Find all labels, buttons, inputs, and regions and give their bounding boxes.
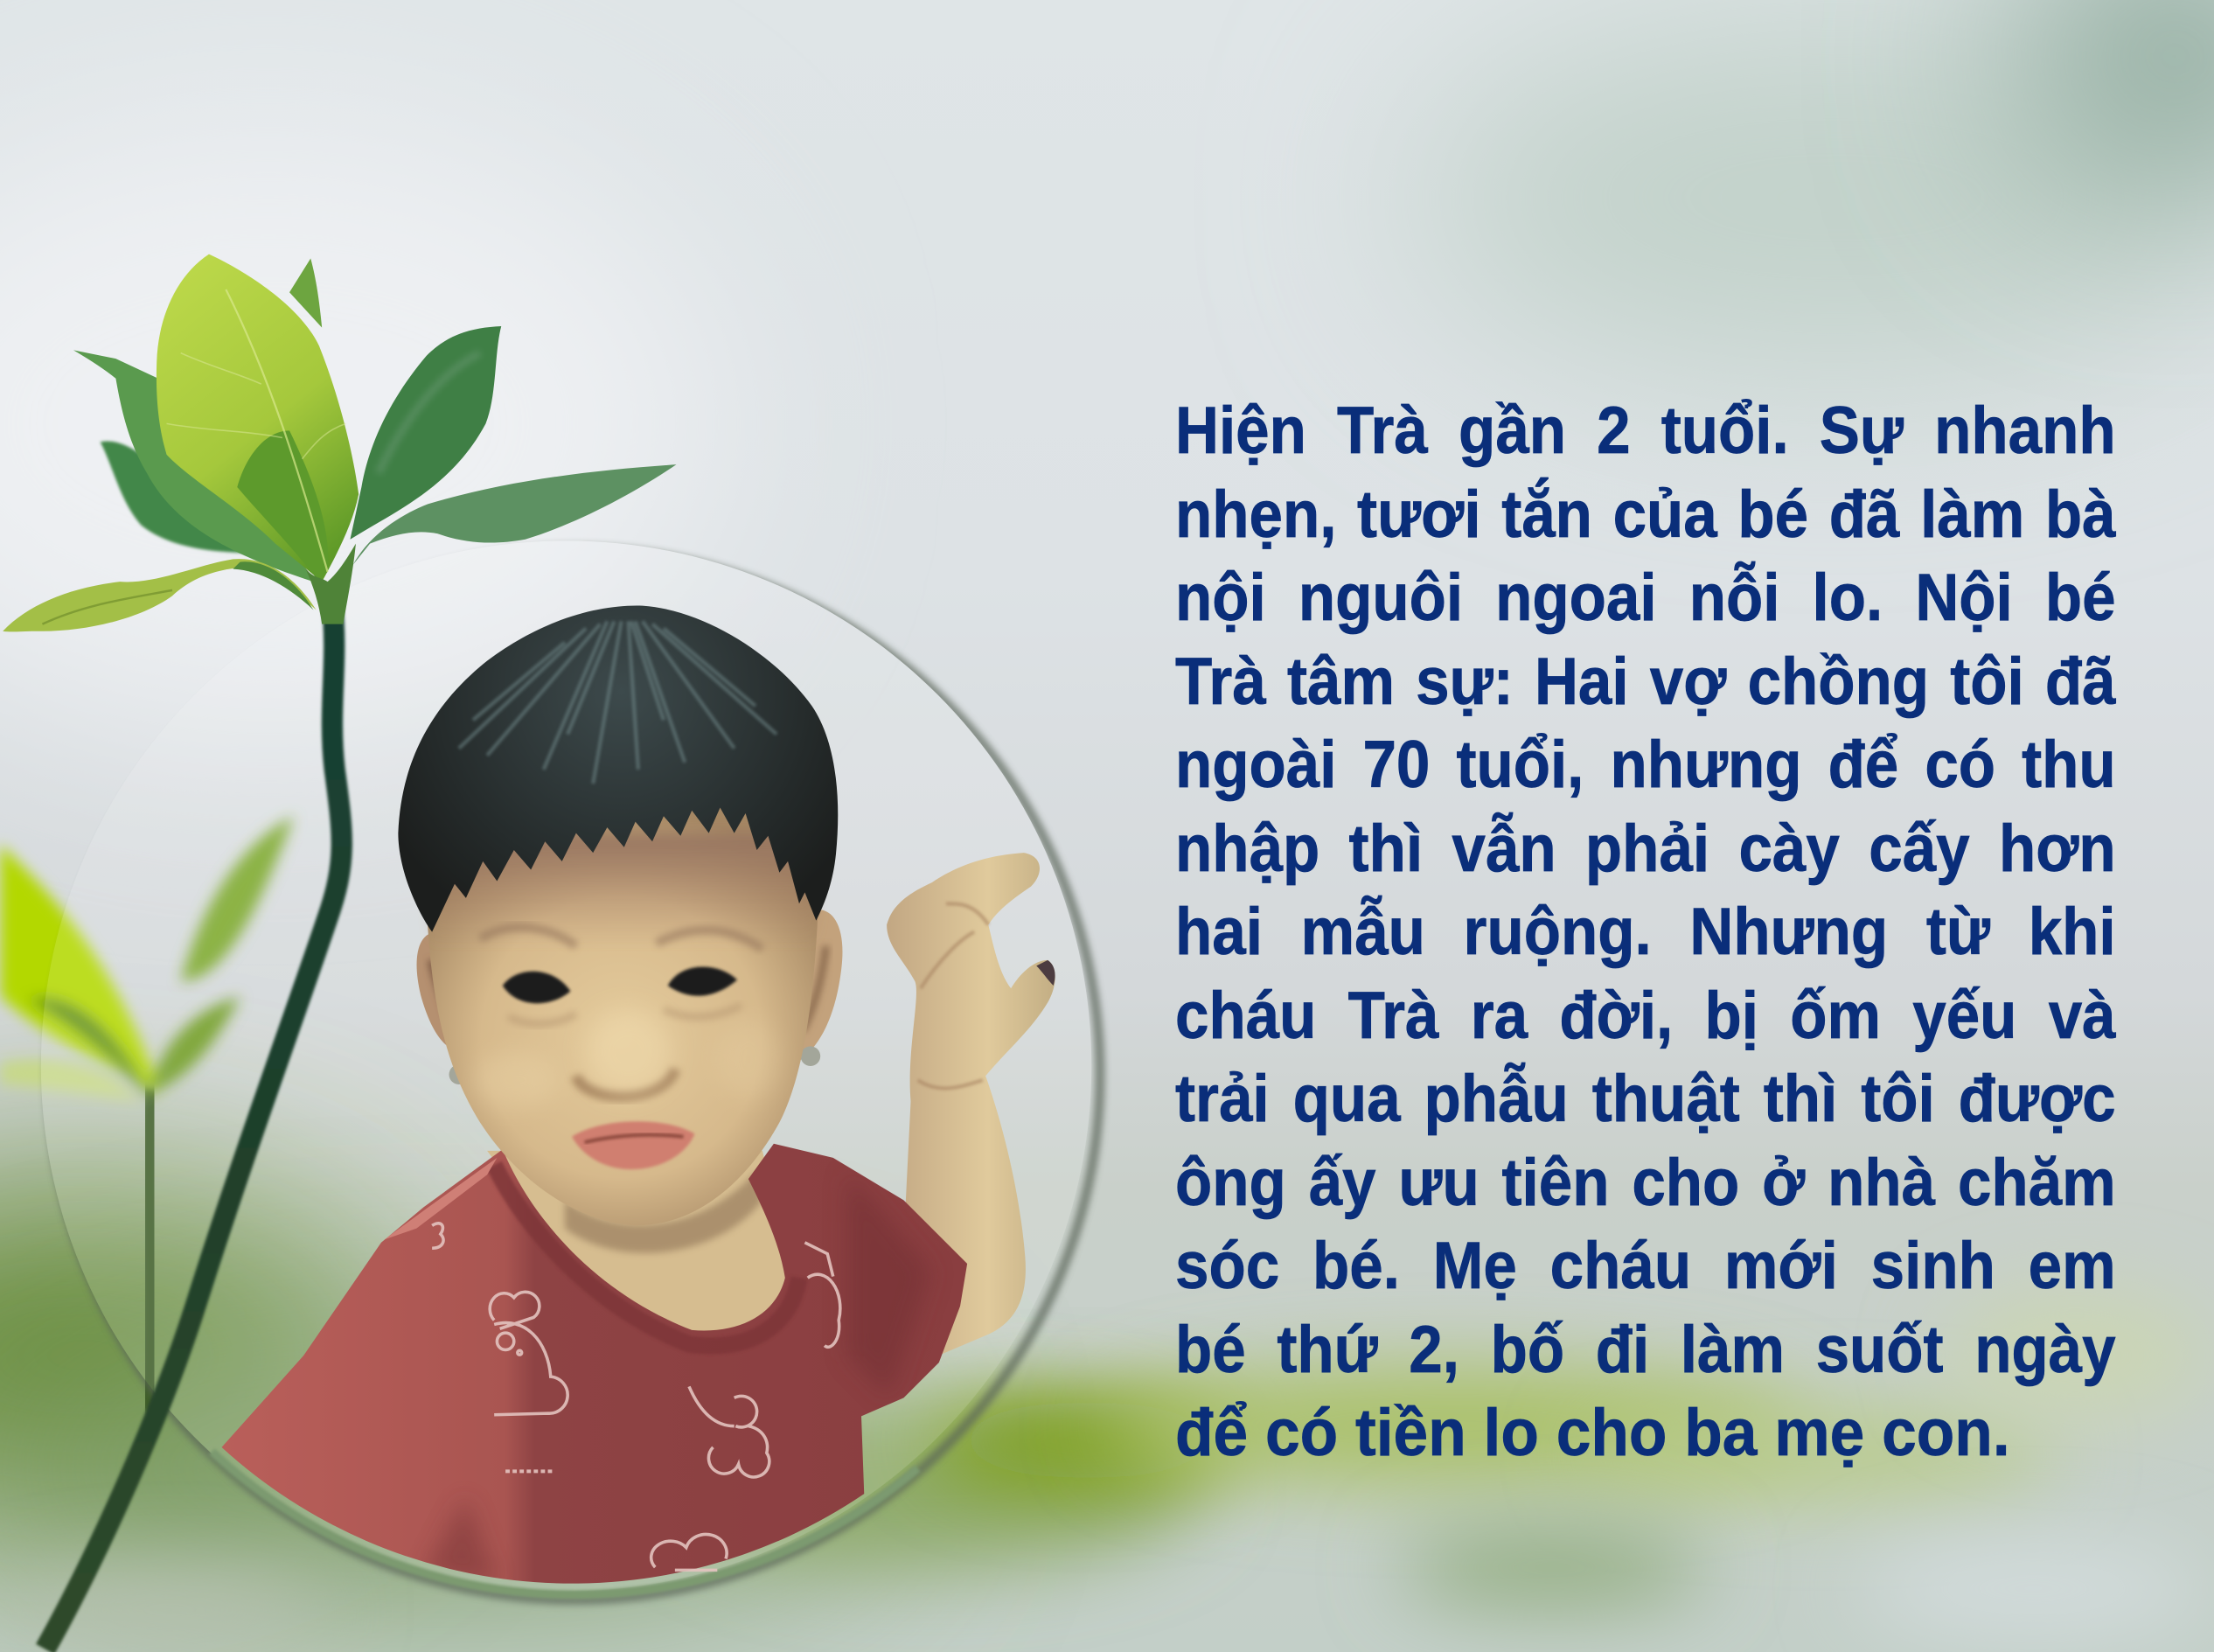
hair strands: [459, 621, 776, 784]
text block: story paragraph: để có tiền lo cho ba mẹ con.: [1175, 1396, 2009, 1470]
text block: story paragraph: trải qua phẫu thuật thì tôi được: [1175, 1062, 2115, 1136]
text block: story paragraph: ngoài 70 tuổi, nhưng để có thu: [1175, 728, 2115, 802]
shirt bear prints: [432, 1223, 840, 1570]
shirt: [222, 1144, 967, 1585]
text block: story paragraph: nhập thì vẫn phải cày cấy hơn: [1175, 812, 2115, 885]
leaf: large bright front: [157, 254, 359, 582]
text block: story paragraph: ông ấy ưu tiên cho ở nhà chăm: [1175, 1146, 2115, 1219]
ears: [417, 910, 842, 1084]
text block: story paragraph: sóc bé. Mẹ cháu mới sinh em: [1175, 1229, 2115, 1303]
leaf: lower right long: [353, 464, 676, 565]
lens circle: frosted disc with soft rim shadow: [41, 540, 1100, 1600]
raised arm and hand: [887, 853, 1055, 1358]
blurred background plant: [0, 816, 294, 1412]
hair: [398, 606, 838, 932]
text block: story paragraph: Trà tâm sự: Hai vợ chồng tôi đã: [1175, 644, 2115, 719]
main plant stem: [45, 600, 342, 1649]
plant: crown where leaves join stem: [305, 544, 356, 624]
nose shading: [576, 1069, 675, 1097]
text block: story paragraph: nhẹn, tươi tắn của bé đã làm bà: [1175, 477, 2115, 551]
eyes: [480, 927, 762, 1024]
text block: story paragraph: nội nguôi ngoai nỗi lo. Nội bé: [1175, 561, 2115, 635]
text block: story paragraph: Hiện Trà gần 2 tuổi. Sự nhanh: [1175, 394, 2115, 468]
child portrait cut-out: [222, 606, 1055, 1585]
plant: leaves cluster: [3, 254, 676, 631]
leaf shadow and midrib: [237, 430, 328, 582]
leaf: back tip: [289, 258, 322, 328]
text block: story paragraph: bé thứ 2, bố đi làm suốt ngày: [1175, 1312, 2115, 1387]
neck: [487, 1151, 790, 1342]
leaf: dark back left: [101, 441, 289, 554]
face: [427, 763, 819, 1225]
leaf: back left serrated: [73, 350, 313, 582]
text block: story paragraph: [1175, 394, 2116, 1470]
shirt collar shading: [494, 1165, 799, 1346]
leaf: low left: [3, 559, 317, 631]
text block: story paragraph: cháu Trà ra đời, bị ốm yếu và: [1175, 978, 2115, 1053]
mouth: [572, 1121, 694, 1169]
text block: story paragraph: hai mẫu ruộng. Nhưng từ khi: [1175, 895, 2115, 969]
leaf: upper right dark green: [350, 326, 501, 540]
